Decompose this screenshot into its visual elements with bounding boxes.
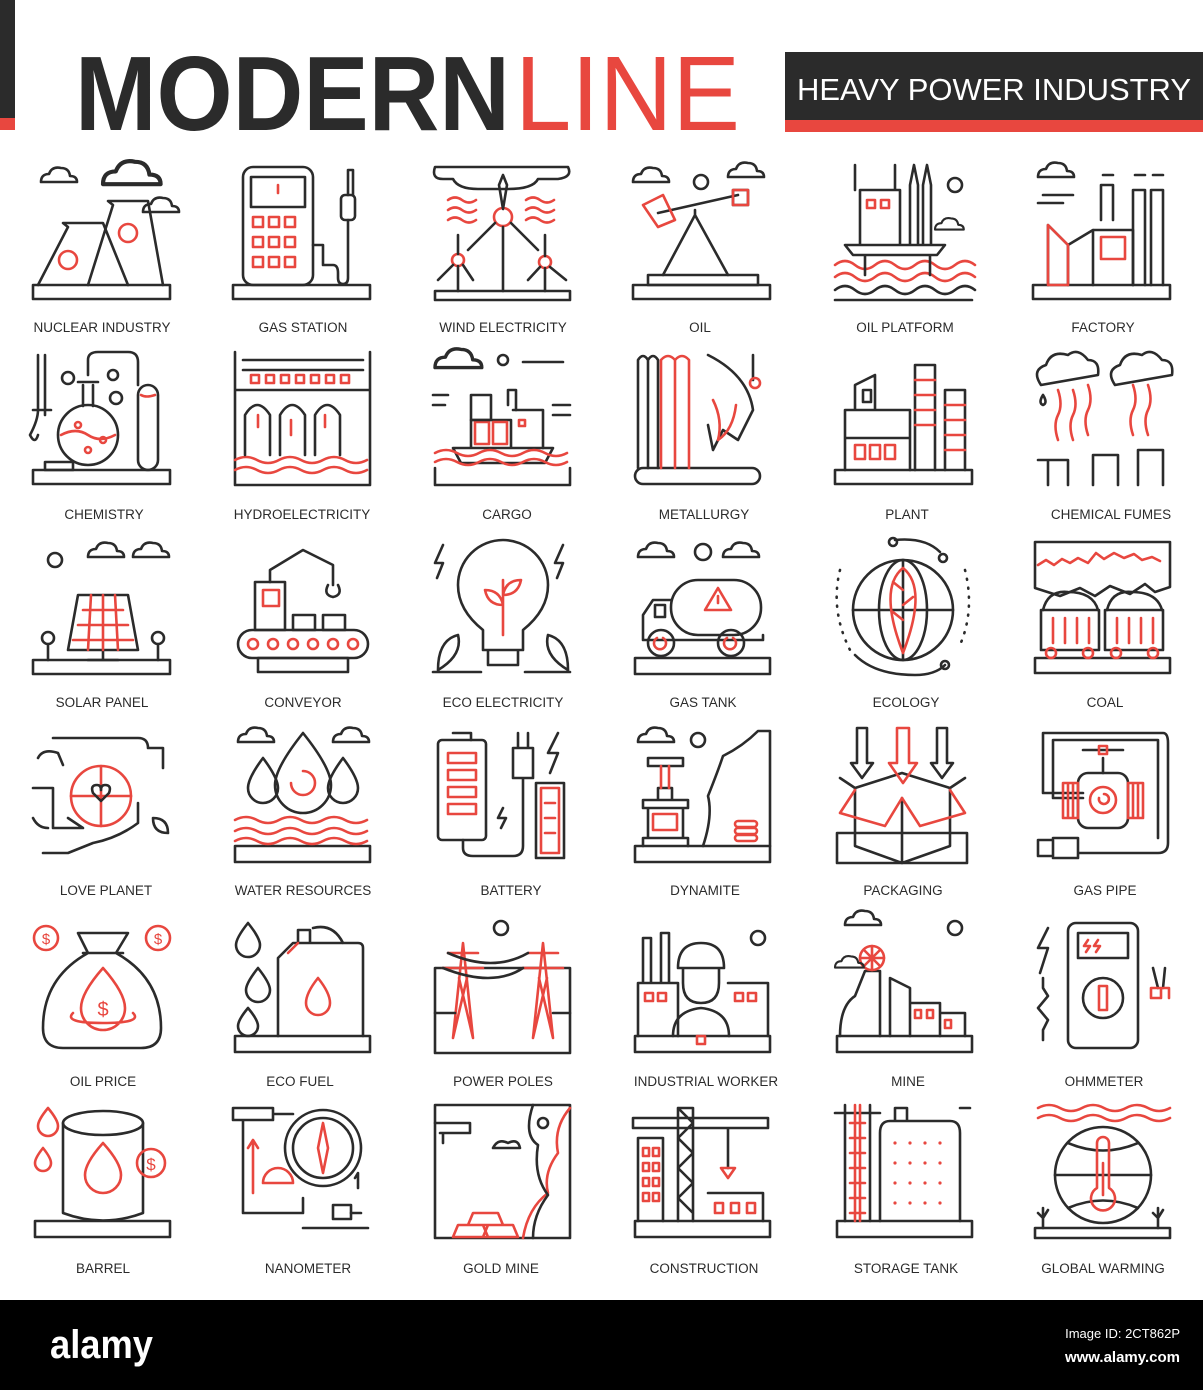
icon: industrial worker bbox=[635, 931, 770, 1052]
icon: ecology bbox=[837, 538, 969, 675]
icon: oil price bbox=[34, 926, 170, 1048]
icon: plant bbox=[835, 365, 972, 484]
icon: coal bbox=[1035, 542, 1170, 673]
icon: mine bbox=[835, 911, 972, 1052]
labels: WATER RESOURCES bbox=[235, 883, 371, 898]
icon: eco fuel bbox=[235, 923, 370, 1052]
icon: battery bbox=[438, 733, 564, 858]
labels: FACTORY bbox=[1071, 320, 1135, 335]
icon: factory bbox=[1033, 163, 1170, 299]
icon: ohmmeter bbox=[1038, 923, 1169, 1048]
icon: dynamite bbox=[635, 728, 770, 862]
icon: wind electricity bbox=[434, 167, 570, 300]
icon: barrel: $ bbox=[146, 1155, 156, 1174]
icon: metallurgy bbox=[635, 355, 760, 484]
subtitle box: HEAVY POWER INDUSTRY bbox=[797, 72, 1191, 107]
labels: DYNAMITE bbox=[670, 883, 740, 898]
labels: CHEMICAL FUMES bbox=[1051, 507, 1171, 522]
icon: solar panel bbox=[33, 543, 170, 674]
icon: eco electricity bbox=[433, 540, 570, 672]
icon: conveyor bbox=[238, 550, 368, 672]
labels: HYDROELECTRICITY bbox=[234, 507, 370, 522]
icon: chemistry bbox=[30, 352, 170, 484]
icon: construction bbox=[633, 1108, 770, 1237]
labels: OIL bbox=[689, 320, 711, 335]
icon: global warming bbox=[1035, 1105, 1170, 1238]
labels: OIL PLATFORM bbox=[856, 320, 954, 335]
labels: GAS PIPE bbox=[1073, 883, 1137, 898]
labels: OIL PRICE bbox=[70, 1074, 136, 1089]
icon: nuclear industry bbox=[33, 161, 179, 299]
labels: CONSTRUCTION bbox=[650, 1261, 758, 1276]
icon: water resources bbox=[235, 728, 370, 862]
labels: WIND ELECTRICITY bbox=[439, 320, 567, 335]
labels: GAS TANK bbox=[669, 695, 737, 710]
labels: METALLURGY bbox=[659, 507, 749, 522]
labels: CARGO bbox=[482, 507, 532, 522]
labels: ECO FUEL bbox=[266, 1074, 334, 1089]
labels: SOLAR PANEL bbox=[56, 695, 149, 710]
icon: gas pipe bbox=[1038, 733, 1168, 858]
labels: CHEMISTRY bbox=[64, 507, 144, 522]
labels: PLANT bbox=[885, 507, 929, 522]
icon: gas tank bbox=[635, 543, 770, 674]
icon: love planet bbox=[33, 738, 168, 853]
footer bar: Image ID: 2CT862P bbox=[1065, 1326, 1180, 1341]
labels: STORAGE TANK bbox=[854, 1261, 958, 1276]
labels: NANOMETER bbox=[265, 1261, 351, 1276]
icon: hydroelectricity bbox=[235, 352, 370, 485]
labels bbox=[33, 320, 1171, 1276]
labels: CONVEYOR bbox=[264, 695, 342, 710]
labels: BATTERY bbox=[480, 883, 542, 898]
labels: OHMMETER bbox=[1065, 1074, 1144, 1089]
icon: gold mine bbox=[435, 1105, 570, 1238]
icon: packaging bbox=[837, 728, 967, 863]
icon: oil platform bbox=[835, 165, 975, 300]
labels: NUCLEAR INDUSTRY bbox=[33, 320, 171, 335]
icon: chemical fumes bbox=[1037, 352, 1172, 485]
labels: LOVE PLANET bbox=[60, 883, 152, 898]
labels: COAL bbox=[1087, 695, 1124, 710]
icon: oil bbox=[633, 163, 770, 299]
left bar bbox=[0, 0, 15, 130]
labels: BARREL bbox=[76, 1261, 130, 1276]
icon: gas station bbox=[233, 167, 370, 299]
title accent: LINE bbox=[515, 35, 740, 153]
labels: MINE bbox=[891, 1074, 925, 1089]
labels: INDUSTRIAL WORKER bbox=[634, 1074, 778, 1089]
icon: barrel bbox=[35, 1108, 170, 1237]
subtitle box bbox=[785, 52, 1203, 132]
icon: cargo bbox=[433, 349, 570, 485]
labels: ECOLOGY bbox=[873, 695, 939, 710]
footer bar: www.alamy.com bbox=[1064, 1349, 1180, 1366]
labels: ECO ELECTRICITY bbox=[443, 695, 563, 710]
footer bar bbox=[0, 1300, 1203, 1390]
title: MODERN bbox=[75, 35, 510, 153]
icon: oil price: $ bbox=[97, 999, 109, 1021]
header bbox=[0, 0, 1203, 153]
labels: GAS STATION bbox=[259, 320, 347, 335]
icon: power poles bbox=[435, 921, 570, 1053]
labels: PACKAGING bbox=[863, 883, 943, 898]
icon: oil price: $ bbox=[154, 931, 163, 948]
footer bar: alamy bbox=[50, 1323, 154, 1367]
icon: storage tank bbox=[835, 1105, 972, 1237]
icon: nanometer bbox=[233, 1108, 368, 1228]
labels: POWER POLES bbox=[453, 1074, 553, 1089]
icon: oil price: $ bbox=[42, 931, 51, 948]
labels: GLOBAL WARMING bbox=[1041, 1261, 1165, 1276]
labels: GOLD MINE bbox=[463, 1261, 539, 1276]
